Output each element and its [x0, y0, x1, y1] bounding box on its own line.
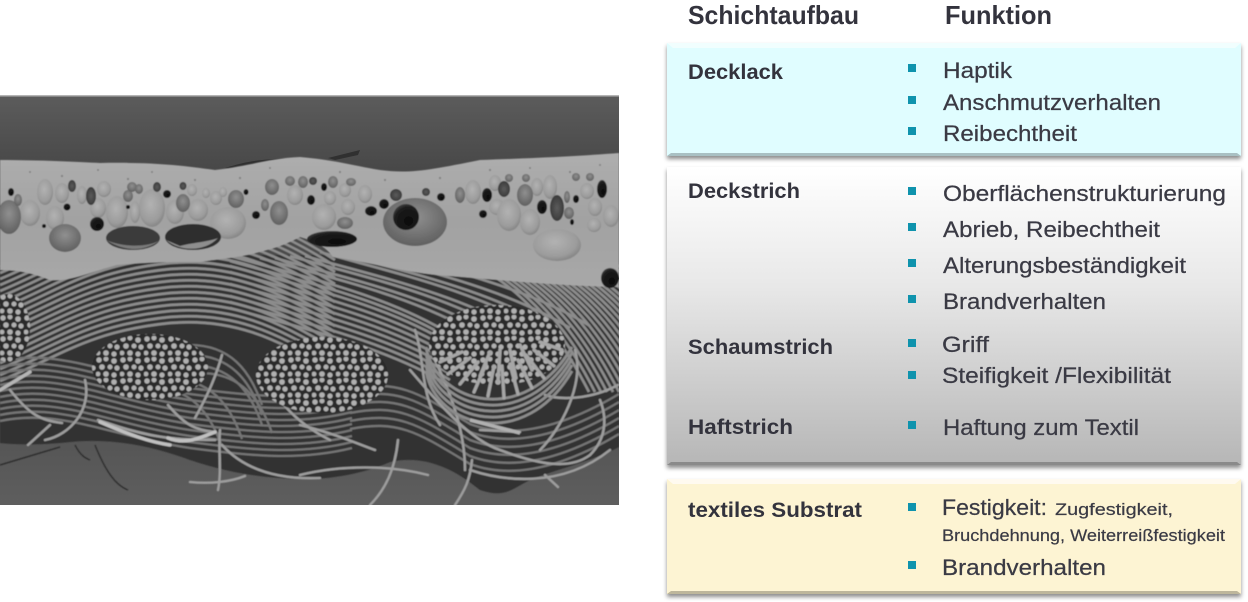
heading: Funktion: Funktion	[945, 0, 1052, 30]
panel: textiles Substrat: Zugfestigkeit,	[1055, 500, 1173, 519]
yarn bundle 2	[92, 334, 208, 400]
panel: Deckstrich, Schaumstrich, Haftstrich: Deckstrich	[688, 179, 800, 203]
panel: Deckstrich, Schaumstrich, Haftstrich: Haftstrich	[688, 415, 793, 439]
panel: Decklack: Decklack	[688, 60, 783, 84]
panel: Deckstrich, Schaumstrich, Haftstrich: Alterungsbeständigkeit	[943, 253, 1187, 278]
panel: Deckstrich, Schaumstrich, Haftstrich: Abrieb, Reibechtheit	[943, 217, 1161, 242]
panel: textiles Substrat: Bruchdehnung, Weiterreißfestigkeit	[942, 526, 1225, 545]
yarn bundle 4	[426, 305, 572, 433]
panel: Deckstrich, Schaumstrich, Haftstrich: Steifigkeit /Flexibilität	[942, 363, 1172, 388]
panel: Deckstrich, Schaumstrich, Haftstrich: Brandverhalten	[943, 289, 1106, 314]
panel: Decklack: Reibechtheit	[943, 121, 1078, 146]
panel: textiles Substrat	[667, 479, 1241, 594]
panel: Deckstrich, Schaumstrich, Haftstrich: Griff	[942, 332, 990, 357]
loose strands	[0, 330, 618, 505]
panel: textiles Substrat: Festigkeit:	[942, 495, 1047, 520]
photo: microscope cross-section of coated textile	[0, 95, 619, 505]
panel: textiles Substrat: textiles Substrat	[688, 498, 862, 522]
panel: Deckstrich, Schaumstrich, Haftstrich: Oberflächenstrukturierung	[943, 181, 1226, 206]
panel: Deckstrich, Schaumstrich, Haftstrich: Schaumstrich	[688, 335, 833, 359]
panel: Deckstrich, Schaumstrich, Haftstrich	[667, 167, 1241, 465]
yarn bundle 1	[0, 294, 30, 362]
fibre mass	[0, 237, 619, 505]
coating layer with foam bubbles	[0, 153, 619, 288]
panel: textiles Substrat: Brandverhalten	[942, 555, 1106, 580]
large flat voids	[106, 226, 160, 250]
loose flake on surface	[225, 150, 360, 170]
yarn bundle 3	[256, 337, 388, 413]
panel: Decklack	[667, 43, 1241, 156]
panel: Deckstrich, Schaumstrich, Haftstrich: Haftung zum Textil	[943, 415, 1139, 440]
panel: Decklack: Anschmutzverhalten	[943, 90, 1161, 115]
panel: Decklack: Haptik	[943, 58, 1013, 83]
table header	[688, 0, 1052, 30]
heading: Schichtaufbau: Schichtaufbau	[688, 0, 859, 30]
